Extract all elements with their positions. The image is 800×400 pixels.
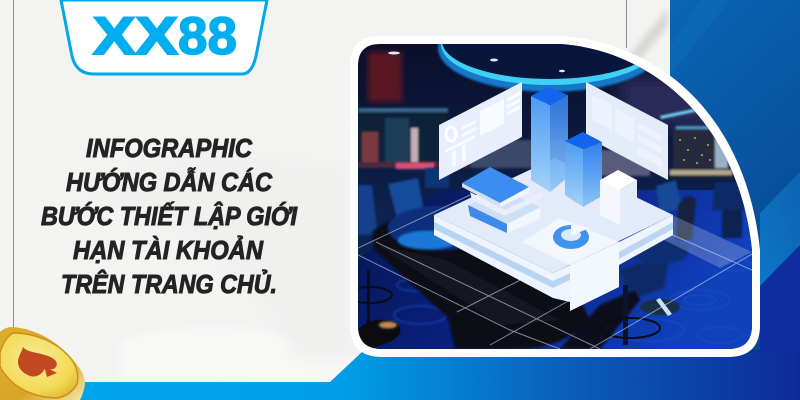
- icon: spade: [18, 347, 57, 377]
- carpet floor: [358, 190, 752, 349]
- logo wordmark: 88: [178, 7, 237, 66]
- photo: casino room with 3D dashboard: [358, 44, 752, 349]
- books: [462, 167, 542, 233]
- back wall windows: [358, 108, 744, 180]
- ceiling and red glow: [364, 44, 710, 132]
- hanging sheet: [570, 242, 619, 311]
- right floating panel: [586, 82, 668, 180]
- glass floor plate: [358, 195, 752, 349]
- bottom blue bar: [0, 352, 800, 400]
- tall bar: [531, 87, 568, 192]
- logo wordmark: XX: [93, 7, 178, 66]
- round table: [372, 205, 688, 349]
- platform: [434, 158, 673, 302]
- chairs: [358, 168, 748, 240]
- data pad with donut: [522, 218, 619, 265]
- stools: [348, 270, 680, 349]
- screen speckles: [679, 137, 711, 164]
- icon: gold spade coin: [0, 327, 85, 400]
- title text: INFOGRAPHIC: [86, 133, 253, 163]
- title text: HƯỚNG DẪN CÁC: [66, 167, 273, 197]
- title text: BƯỚC THIẾT LẬP GIỚI: [41, 201, 298, 231]
- white cube: [600, 170, 637, 225]
- title text: HẠN TÀI KHOẢN: [73, 235, 264, 265]
- logo wordmark: [93, 7, 237, 66]
- blue right panel: [670, 0, 800, 400]
- title text: [41, 133, 298, 299]
- second bar: [565, 132, 602, 207]
- left floating panel: [439, 82, 522, 180]
- title text: TRÊN TRANG CHỦ.: [61, 269, 277, 299]
- photo frame: [348, 3, 760, 357]
- logo badge: [61, 0, 267, 74]
